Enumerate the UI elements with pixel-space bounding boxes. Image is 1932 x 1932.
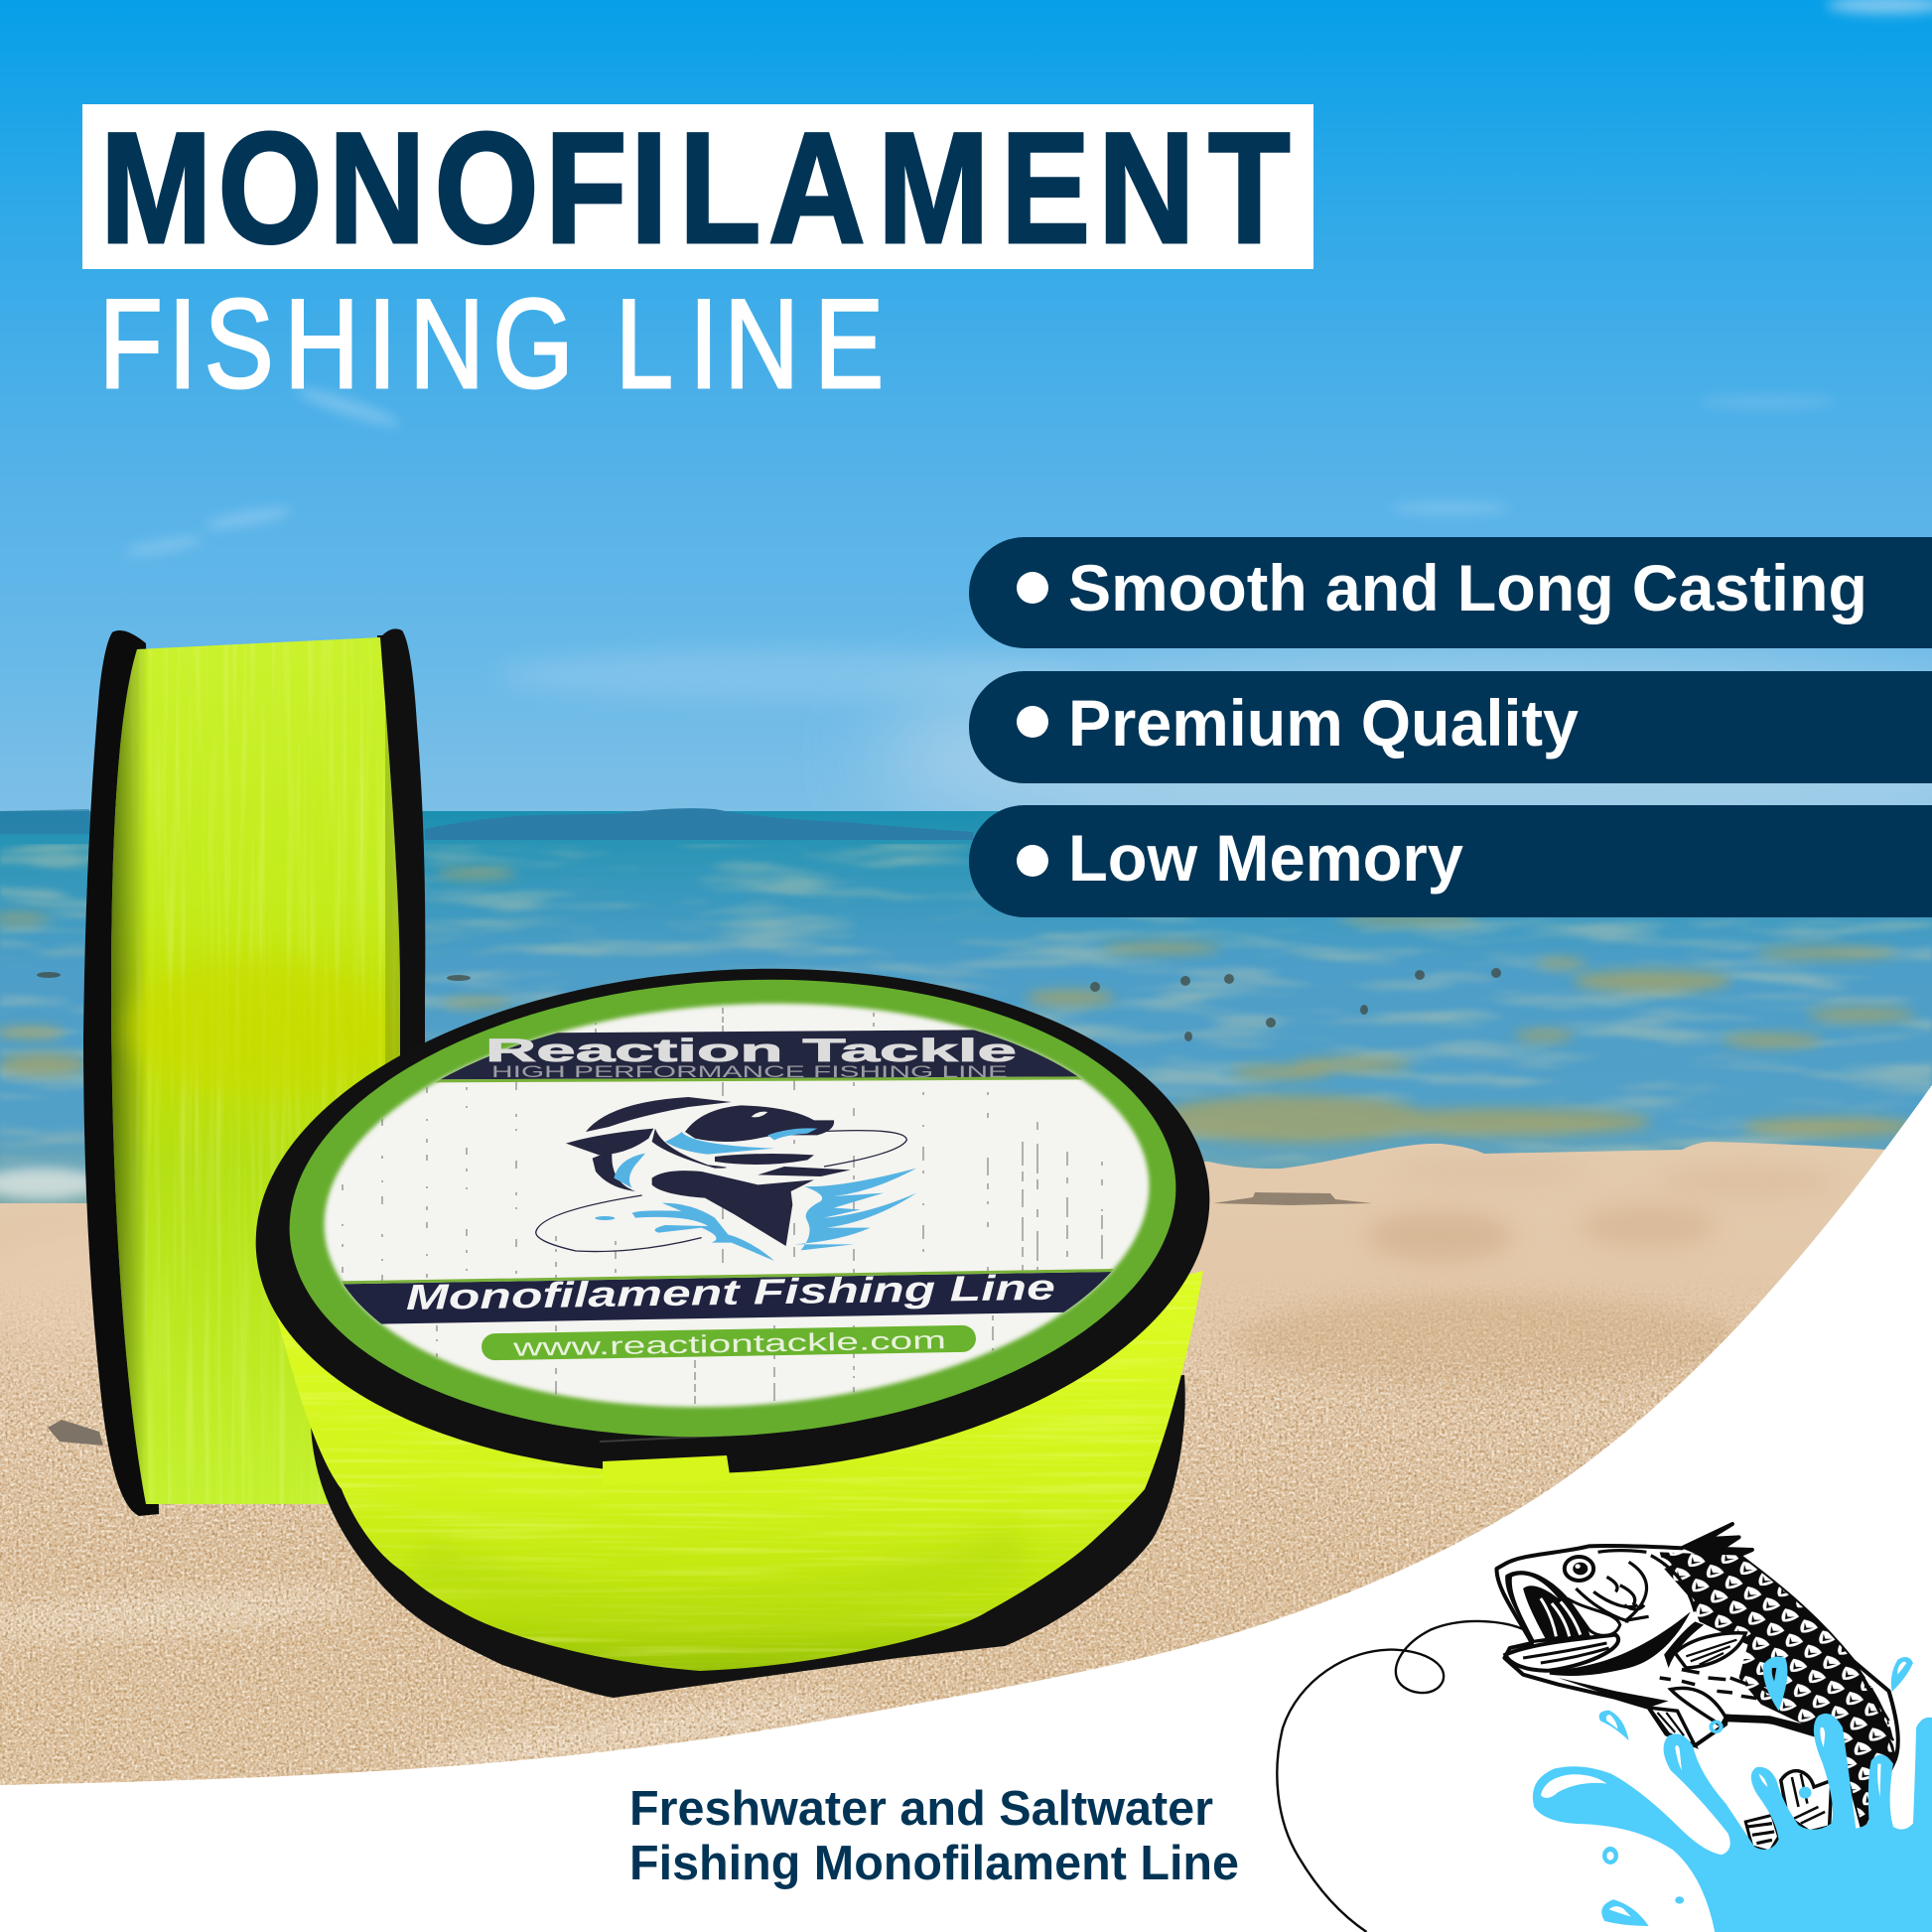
- back spool of line: [83, 628, 425, 1516]
- green line under band: [435, 1076, 1082, 1082]
- pectoral fin: [1675, 1633, 1745, 1668]
- illustration: leaping fish on line with splash: [1277, 1524, 1932, 1932]
- brand name: Reaction Tackle: [485, 1033, 1017, 1068]
- water splash: [1533, 1714, 1932, 1932]
- driftwood on sand right: [1213, 1192, 1372, 1205]
- logo: jumping fish: [536, 1097, 916, 1261]
- caption: [629, 1782, 1239, 1890]
- website url: www.reactiontackle.com: [511, 1326, 946, 1362]
- sand grain texture: [0, 1287, 1773, 1785]
- right flange: [377, 628, 425, 1291]
- mouth ridges: [1541, 1598, 1581, 1636]
- green ring: [276, 954, 1189, 1462]
- lid rim: [240, 941, 1225, 1501]
- rear fin: [1781, 1771, 1832, 1832]
- bullet: [1017, 572, 1048, 604]
- driftwood on sand left: [48, 1420, 103, 1446]
- top brand band: [440, 1030, 1078, 1080]
- belly marks: [1660, 1670, 1776, 1699]
- title box: [82, 100, 1313, 276]
- belly fins: [1671, 1688, 1725, 1725]
- anal fin fragment: [1745, 1815, 1779, 1852]
- green line above product band: [342, 1269, 1114, 1285]
- lid notch: [600, 1436, 731, 1485]
- left flange: [83, 630, 159, 1516]
- title line one: MONOFILAMENT: [100, 100, 1291, 276]
- distant mountains: [425, 808, 973, 840]
- white curved panel: [0, 1085, 1932, 1932]
- gill lines: [1576, 1551, 1695, 1621]
- bottom flange: [311, 1375, 1185, 1698]
- fish silhouette: [1496, 1524, 1898, 1829]
- droplet highlights: [1606, 1662, 1906, 1917]
- fish water accents: [595, 1128, 916, 1261]
- product name on label: Monofilament Fishing Line: [405, 1267, 1055, 1317]
- tail fin lines: [1856, 1665, 1895, 1757]
- bullet: [1017, 706, 1048, 738]
- website pill: [482, 1325, 976, 1362]
- dorsal spikes: [1682, 1524, 1752, 1559]
- bullet: [1017, 845, 1048, 877]
- line body: [111, 637, 400, 1504]
- belly line: [1725, 1715, 1816, 1737]
- feature text: Smooth and Long Casting: [1068, 551, 1867, 624]
- feature pill: low memory: [969, 805, 1932, 917]
- feature text: Low Memory: [1068, 821, 1463, 895]
- background: sky: [0, 0, 1932, 864]
- lower jaw: [1505, 1635, 1618, 1671]
- bottom product band: [344, 1272, 1112, 1324]
- fishing line: [1277, 1621, 1527, 1932]
- background: sea: [0, 808, 1932, 1203]
- splash droplets: [1599, 1656, 1913, 1926]
- label: [321, 1001, 1153, 1411]
- fish: [1496, 1524, 1898, 1852]
- tongue and upper lip: [1567, 1598, 1620, 1635]
- eye highlight: [752, 1112, 767, 1117]
- front spool of line: [240, 941, 1225, 1698]
- caption: Freshwater and Saltwater: [629, 1782, 1213, 1836]
- scales: [1660, 1552, 1894, 1829]
- feature pill: premium quality: [969, 671, 1932, 783]
- title line two: FISHING LINE: [99, 273, 884, 414]
- feature text: Premium Quality: [1068, 686, 1579, 759]
- fish body: [566, 1097, 851, 1246]
- fishing line loop: [536, 1131, 906, 1252]
- eye: [1565, 1557, 1593, 1581]
- gill and jaw stripes: [1550, 1611, 1691, 1676]
- mouth: [1505, 1571, 1591, 1643]
- background: sand: [0, 1142, 1884, 1785]
- distressed wood marks: [343, 1008, 1102, 1405]
- brand tagline: HIGH PERFORMANCE FISHING LINE: [491, 1062, 1008, 1081]
- caption: Fishing Monofilament Line: [629, 1837, 1239, 1890]
- splash highlights: [1541, 1727, 1881, 1831]
- line body: [270, 1271, 1203, 1671]
- feature pill: smooth and long casting: [969, 537, 1932, 648]
